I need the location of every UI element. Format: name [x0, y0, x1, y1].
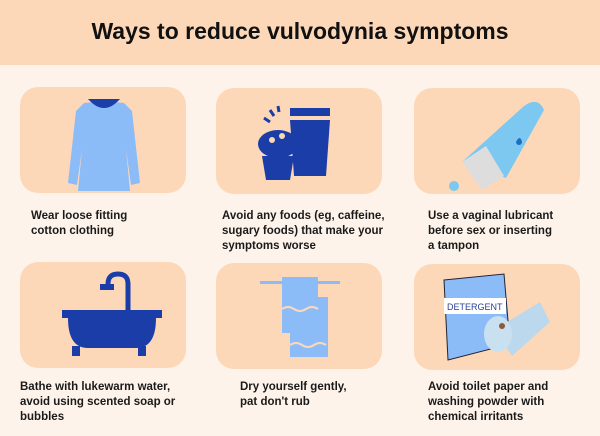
text: foods: Avoid any foods (eg, caffeine, — [222, 210, 385, 222]
text: bath: bubbles — [20, 411, 64, 423]
text: towel: pat don't rub — [240, 396, 310, 408]
panel: lubricant — [414, 88, 580, 194]
panel: towel — [216, 263, 382, 369]
text: detergent — [428, 381, 548, 423]
text: lubricant: before sex or inserting — [428, 225, 552, 237]
text: foods — [222, 210, 385, 252]
text: lubricant — [428, 210, 554, 252]
text: detergent: Avoid toilet paper and — [428, 381, 548, 393]
panel: clothing — [20, 87, 186, 193]
text: detergent: washing powder with — [428, 396, 544, 408]
text: clothing: cotton clothing — [31, 225, 114, 237]
text: detergent: chemical irritants — [428, 411, 523, 423]
text: clothing: Wear loose fitting — [31, 210, 127, 222]
text: foods: sugary foods) that make your — [222, 225, 383, 237]
text: lubricant: a tampon — [428, 240, 479, 252]
text: clothing — [31, 210, 127, 237]
panel: detergent — [414, 264, 580, 370]
text: lubricant: Use a vaginal lubricant — [428, 210, 553, 222]
text: bath: Bathe with lukewarm water, — [20, 381, 170, 393]
text: bath: avoid using scented soap or — [20, 396, 175, 408]
header band — [0, 0, 600, 65]
panel: bath — [20, 262, 186, 368]
text: towel — [240, 381, 347, 408]
panel: foods — [216, 88, 382, 194]
text: bath — [20, 381, 176, 423]
text: towel: Dry yourself gently, — [240, 381, 347, 393]
panel: detergent: DETERGENT — [447, 302, 503, 312]
title: Ways to reduce vulvodynia symptoms — [91, 18, 509, 44]
text: foods: symptoms worse — [222, 240, 316, 252]
